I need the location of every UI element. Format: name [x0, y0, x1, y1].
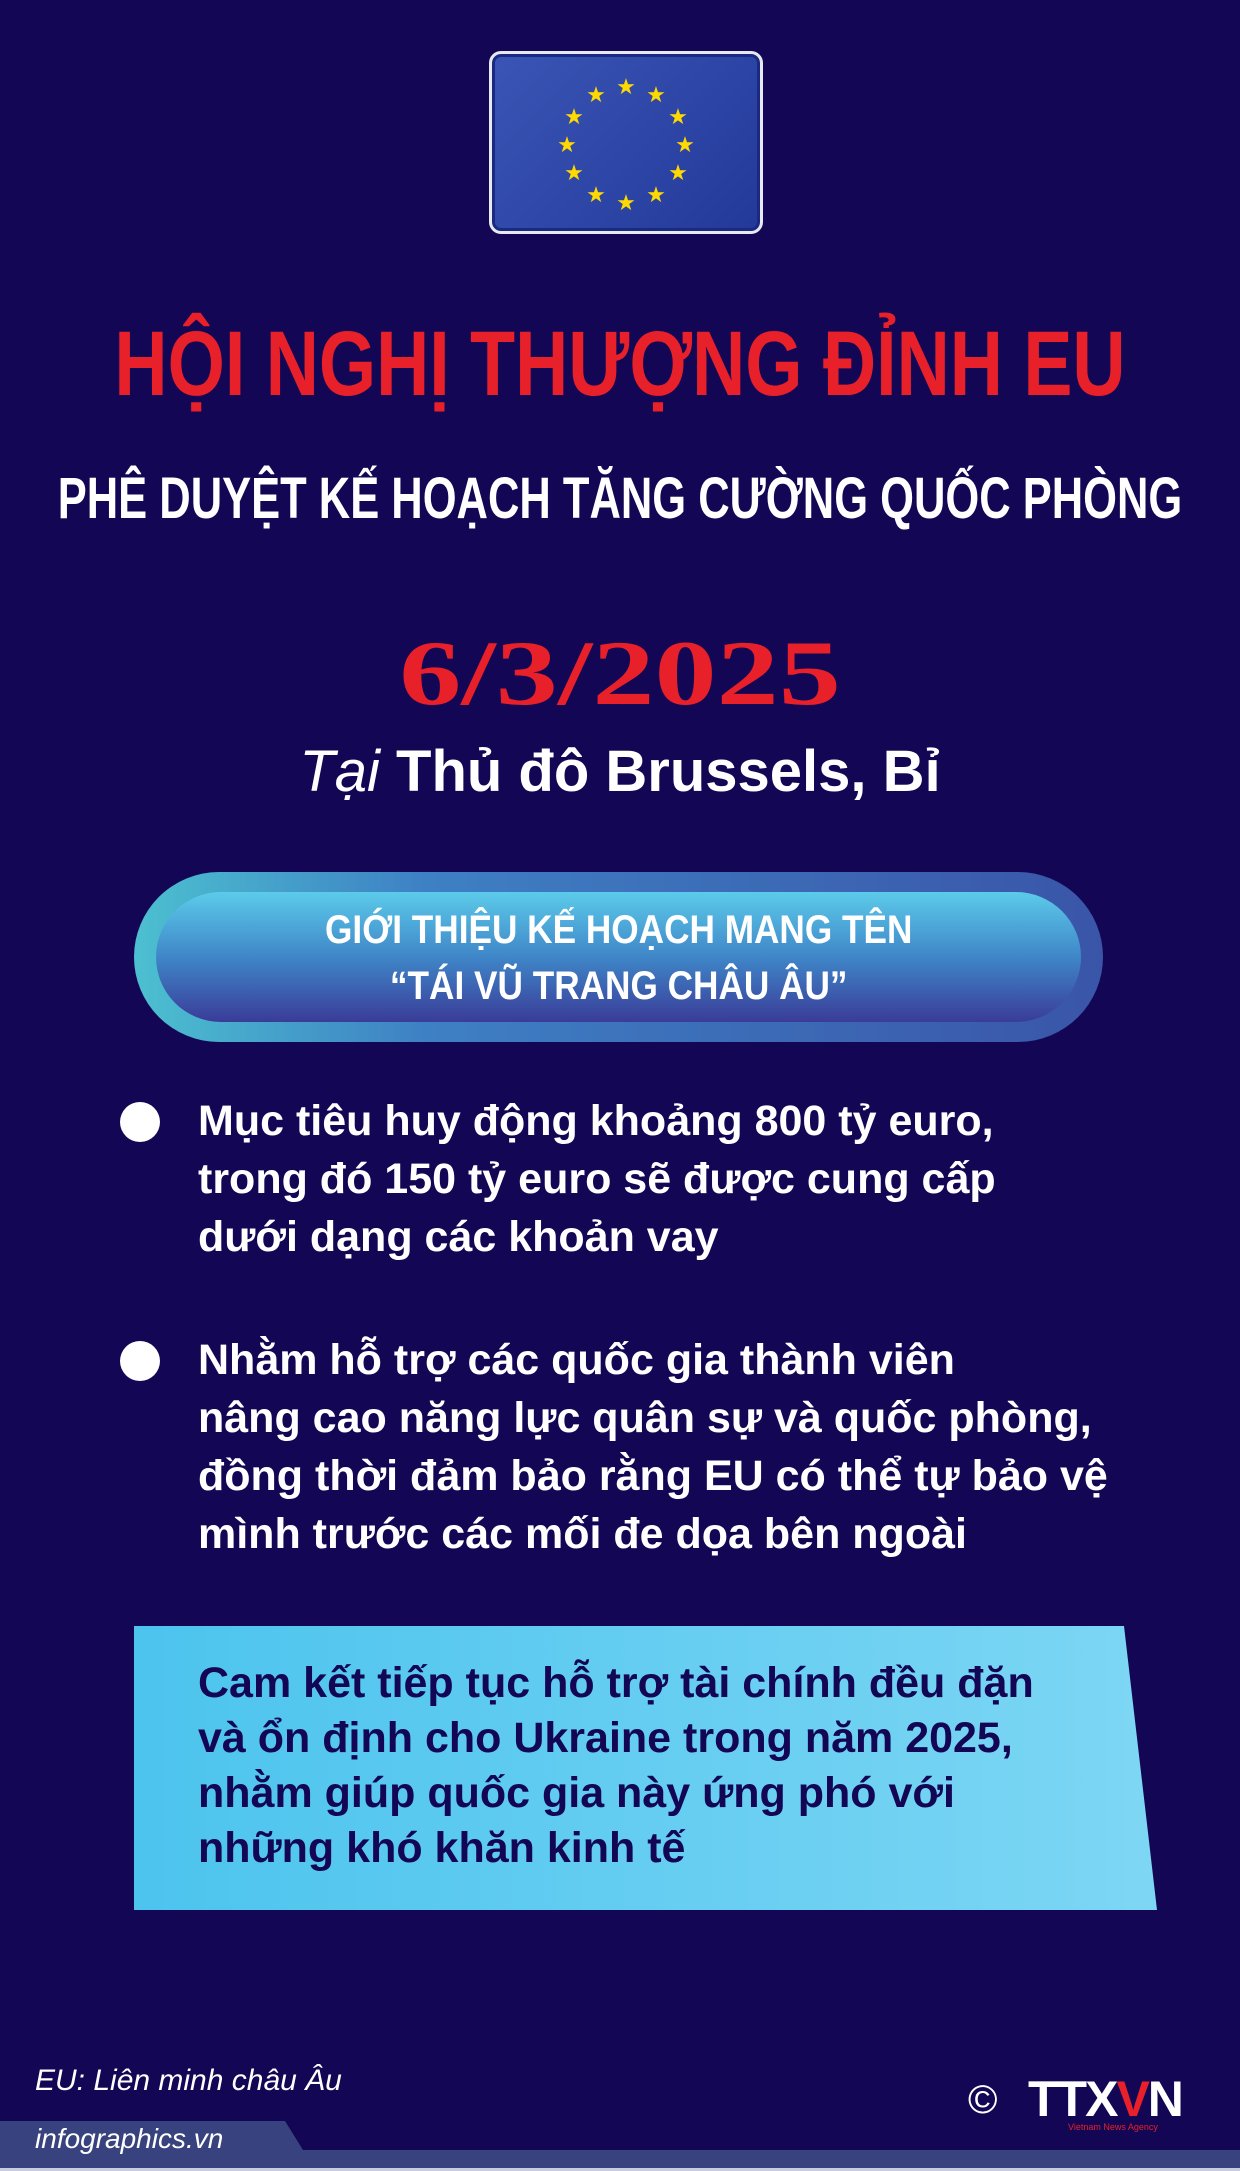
- banner text: [325, 907, 912, 1008]
- footer band: [0, 2121, 1240, 2171]
- icon: EU flag: ★: [586, 182, 606, 207]
- logo: TTXVN: TTXVN: [1028, 2071, 1182, 2127]
- logo: TTXVN: ©: [968, 2078, 997, 2122]
- logo: TTXVN: [968, 2071, 1182, 2132]
- icon: EU flag: ★: [668, 160, 688, 185]
- icon: EU flag: ★: [557, 132, 577, 157]
- location: Tại Thủ đô Brussels, Bỉ: [299, 739, 941, 804]
- icon: EU flag: ★: [616, 74, 636, 99]
- bullet 1: [120, 1097, 996, 1261]
- bullet 2: đồng thời đảm bảo rằng EU có thể tự bảo vệ: [198, 1452, 1108, 1500]
- icon: EU flag: ★: [586, 82, 606, 107]
- callout box: Ukraine: Cam kết tiếp tục hỗ trợ tài chính đều đặn: [198, 1659, 1034, 1707]
- pill banner: [134, 872, 1103, 1042]
- callout box: Ukraine: nhằm giúp quốc gia này ứng phó với: [198, 1769, 955, 1817]
- website: infographics.vn: [35, 2123, 223, 2154]
- icon: EU flag: ★: [646, 82, 666, 107]
- title: HỘI NGHỊ THƯỢNG ĐỈNH EU: [114, 313, 1126, 415]
- callout box: Ukraine: [134, 1626, 1157, 1910]
- footnote: EU: Liên minh châu Âu: [35, 2064, 342, 2097]
- banner text: “TÁI VŨ TRANG CHÂU ÂU”: [390, 964, 847, 1008]
- icon: EU flag: ★: [564, 104, 584, 129]
- icon: EU flag: ★: [675, 132, 695, 157]
- subtitle: PHÊ DUYỆT KẾ HOẠCH TĂNG CƯỜNG QUỐC PHÒNG: [58, 466, 1182, 531]
- bullet 1: Mục tiêu huy động khoảng 800 tỷ euro,: [198, 1097, 994, 1145]
- callout box: Ukraine: và ổn định cho Ukraine trong năm 2025,: [198, 1714, 1013, 1762]
- bullet 1: trong đó 150 tỷ euro sẽ được cung cấp: [198, 1155, 996, 1203]
- bullet 2: nâng cao năng lực quân sự và quốc phòng,: [198, 1394, 1092, 1442]
- icon: EU flag: ★: [646, 182, 666, 207]
- icon: EU flag: ★: [616, 190, 636, 215]
- banner text: GIỚI THIỆU KẾ HOẠCH MANG TÊN: [325, 908, 912, 952]
- icon: EU flag: ★: [564, 160, 584, 185]
- bullet 2: mình trước các mối đe dọa bên ngoài: [198, 1510, 967, 1558]
- bullet 2: [120, 1336, 1108, 1558]
- bullet 2: Nhằm hỗ trợ các quốc gia thành viên: [198, 1336, 955, 1384]
- icon: EU flag: [489, 51, 763, 234]
- logo: TTXVN: Vietnam News Agency: [1068, 2122, 1158, 2132]
- callout box: Ukraine: những khó khăn kinh tế: [198, 1824, 685, 1872]
- icon: EU flag: ★: [668, 104, 688, 129]
- bullet 1: dưới dạng các khoản vay: [198, 1213, 719, 1261]
- date: 6/3/2025: [399, 622, 841, 724]
